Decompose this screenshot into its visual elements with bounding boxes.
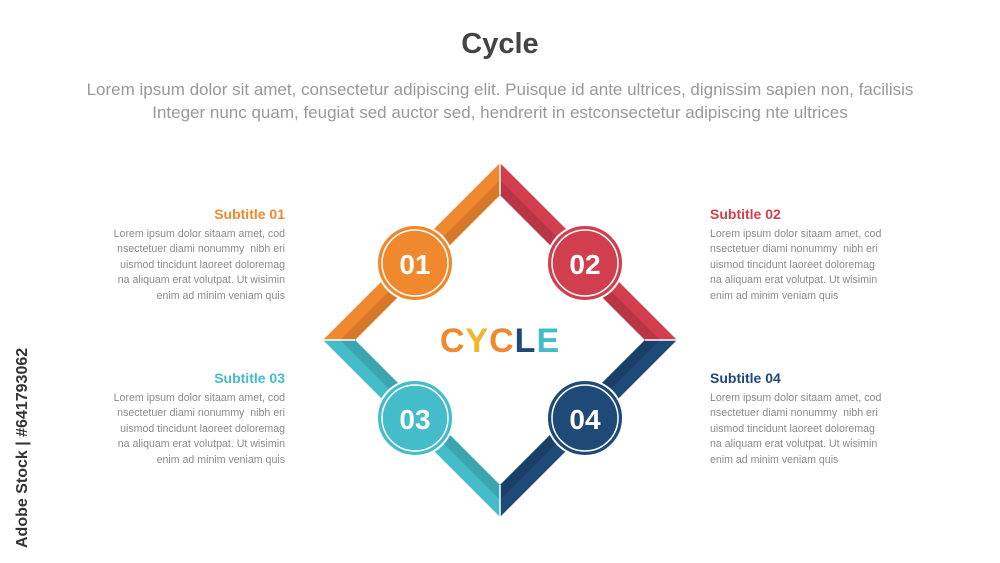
text block: subtitle 04: Subtitle 04 <box>710 370 781 386</box>
circle 04: 04 <box>569 404 601 435</box>
subtitle text: Integer nunc quam, feugiat sed auctor sed, hendrerit in estconsectetur adipiscing nte ultrices <box>152 103 848 122</box>
center label CYCLE: CYCLE <box>440 322 560 360</box>
watermark side text: Adobe Stock | #641793062 <box>14 348 31 548</box>
circle 03: 03 <box>399 404 431 435</box>
segment: navy <box>500 340 677 517</box>
text block: subtitle 02: Lorem ipsum dolor sitaam amet, cod nsectetuer diami nonummy nibh eri uismod tincidunt laoreet doloremag na aliquam erat volutpat. Ut wisimin enim ad minim veniam quis <box>710 228 881 302</box>
circle 01: 01 <box>399 249 431 280</box>
text block: subtitle 03: Lorem ipsum dolor sitaam amet, cod nsectetuer diami nonummy nibh eri uismod tincidunt laoreet doloremag na aliquam erat volutpat. Ut wisimin enim ad minim veniam quis <box>114 392 285 466</box>
circle 04 <box>547 380 623 456</box>
circle 02: 02 <box>569 249 601 280</box>
segment: orange <box>323 163 500 340</box>
text block: subtitle 04: Lorem ipsum dolor sitaam amet, cod nsectetuer diami nonummy nibh eri uismod tincidunt laoreet doloremag na aliquam erat volutpat. Ut wisimin enim ad minim veniam quis <box>710 392 881 466</box>
title: Cycle <box>461 28 539 60</box>
segment: red <box>500 163 677 340</box>
circle 03 <box>377 380 453 456</box>
text block: subtitle 03: Subtitle 03 <box>214 370 285 386</box>
subtitle text: Lorem ipsum dolor sit amet, consectetur adipiscing elit. Puisque id ante ultrices, dignissim sapien non, facilisis <box>87 80 913 99</box>
text block: subtitle 01: Lorem ipsum dolor sitaam amet, cod nsectetuer diami nonummy nibh eri uismod tincidunt laoreet doloremag na aliquam erat volutpat. Ut wisimin enim ad minim veniam quis <box>114 228 285 302</box>
subtitle text <box>87 80 913 122</box>
text block: subtitle 01: Subtitle 01 <box>214 206 285 222</box>
text block: subtitle 02: Subtitle 02 <box>710 206 781 222</box>
circle 02 <box>547 225 623 301</box>
segment: teal <box>323 340 500 517</box>
circle 01 <box>377 225 453 301</box>
